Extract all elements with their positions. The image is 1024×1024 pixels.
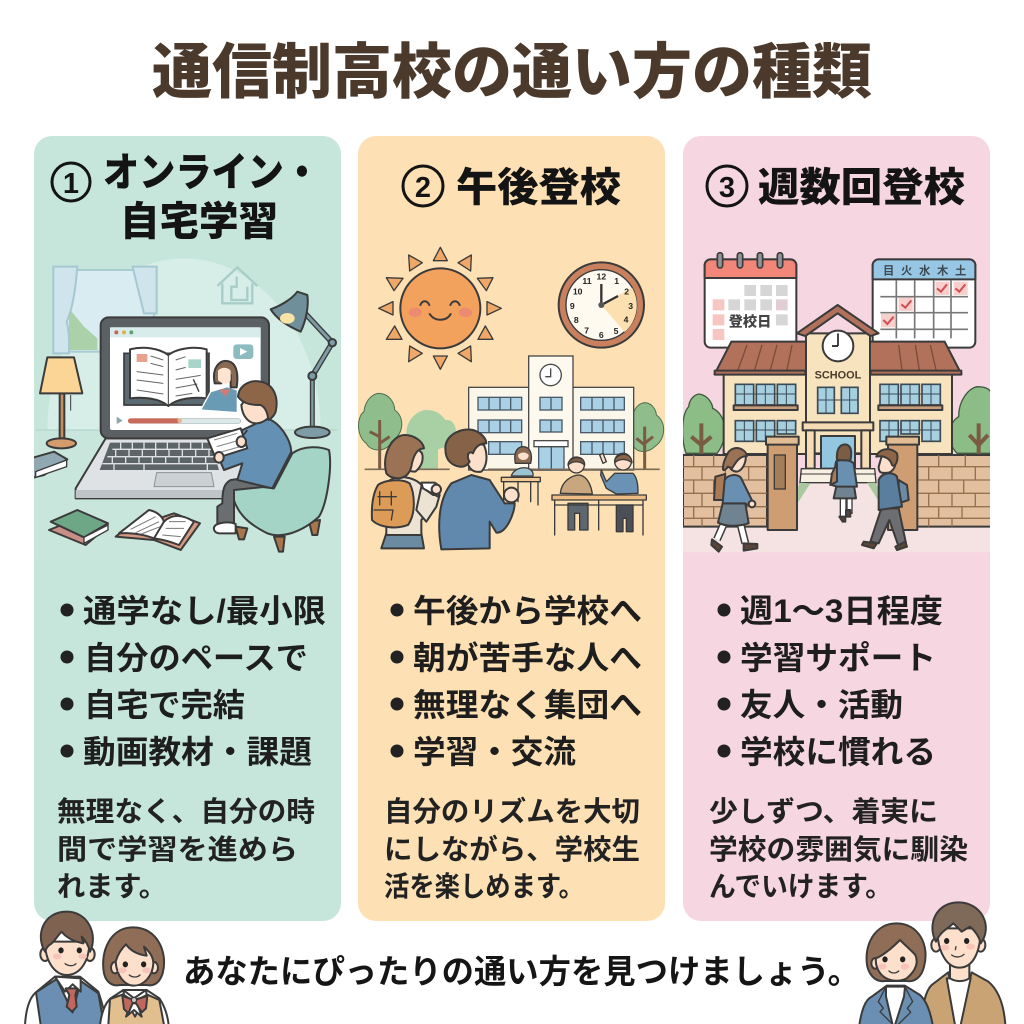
description: weekly: んでいけます。	[709, 871, 892, 902]
icon: floor lamp	[271, 292, 336, 438]
bullet list: online	[60, 593, 326, 770]
icon: wall clock at two o'clock: 3	[628, 301, 633, 311]
icon: school building	[365, 356, 660, 470]
icon: attendance calendar: 登校日	[729, 314, 771, 330]
icon: wall clock at two o'clock: 2	[624, 286, 629, 296]
bullet list: afternoon: 午後から学校へ	[413, 593, 642, 629]
icon: sun	[379, 247, 501, 369]
icon: wall clock at two o'clock: 9	[570, 301, 575, 311]
icon: table lamp	[40, 357, 82, 448]
icon: wall clock at two o'clock: 6	[599, 330, 604, 340]
heading: online home study: オンライン・	[103, 151, 320, 195]
icon: wall clock at two o'clock: 11	[582, 276, 592, 286]
bullet list: online: 自分のペースで	[84, 640, 308, 676]
seated students at double desk	[552, 453, 646, 535]
girl walking into school	[830, 444, 857, 522]
heading: online home study	[52, 151, 320, 244]
icon: wall clock at two o'clock: 4	[624, 315, 629, 325]
description: afternoon	[384, 795, 640, 902]
icon: closed book stack	[31, 452, 108, 545]
description: online: 間で学習を進めら	[57, 834, 298, 865]
description: weekly: 学校の雰囲気に馴染	[709, 834, 968, 865]
on-screen book	[124, 353, 209, 405]
icon: wall clock at two o'clock	[559, 262, 644, 348]
girl student	[100, 927, 169, 1024]
icon: window with curtains	[53, 267, 157, 353]
girl walking left	[711, 448, 757, 552]
front boy in blue jacket	[439, 429, 519, 549]
description: weekly: 少しずつ、着実に	[709, 796, 938, 827]
heading: afternoon attendance: 2	[415, 172, 431, 204]
on-screen teacher	[201, 387, 237, 413]
heading: several days a week: 週数回登校	[758, 166, 965, 210]
bullet list: weekly	[718, 593, 943, 770]
icon: laptop	[74, 316, 270, 500]
boy walking right	[862, 449, 909, 550]
boy student	[25, 912, 105, 1024]
heading: online home study: 自宅学習	[120, 200, 278, 244]
panel: online home study	[31, 136, 341, 921]
title: 通信制高校の通い方の種類	[152, 39, 872, 106]
illustration: sun, clock and school	[359, 247, 664, 549]
icon: weekly check calendar: 目火水木土	[883, 264, 966, 278]
bullet list: afternoon: 無理なく集団へ	[413, 687, 642, 723]
bullet list: weekly: 学習サポート	[740, 640, 936, 676]
heading: online home study: 1	[63, 168, 79, 200]
icon: wall clock at two o'clock: 8	[574, 315, 579, 325]
bullet list: afternoon: 学習・交流	[413, 734, 576, 770]
bullet list: weekly: 週1〜3日程度	[740, 593, 943, 629]
bullet list: online: 自宅で完結	[84, 687, 245, 723]
icon: wall clock at two o'clock: 12	[597, 271, 606, 281]
description: afternoon: 活を楽しめます。	[384, 871, 584, 902]
panel: several days a week	[683, 136, 992, 921]
icon: wall clock at two o'clock: 5	[614, 326, 619, 336]
panel: afternoon attendance	[358, 136, 665, 921]
icon: house	[217, 267, 257, 303]
heading: several days a week: 3	[719, 172, 735, 204]
room glow	[47, 258, 321, 430]
icon: wall clock at two o'clock: 7	[584, 325, 589, 335]
front girl with backpack	[372, 435, 441, 548]
bullet list: online: 動画教材・課題	[83, 734, 312, 770]
description: afternoon: 自分のリズムを大切	[384, 795, 640, 827]
description: online: れます。	[57, 871, 167, 902]
icon: armchair	[231, 447, 330, 552]
icon: trees	[359, 393, 664, 470]
icon: school building	[715, 305, 961, 507]
description: weekly	[709, 796, 968, 902]
bullet list: afternoon	[390, 593, 642, 770]
description: online	[57, 796, 315, 902]
icon: attendance calendar	[705, 253, 796, 348]
mother	[859, 923, 933, 1024]
bullet list: weekly: 友人・活動	[740, 687, 903, 723]
icon: school building: SCHOOL	[815, 370, 861, 382]
bullet list: online: 通学なし/最小限	[83, 593, 326, 629]
father	[922, 902, 1005, 1024]
student figure	[207, 381, 291, 533]
students, footer left	[25, 912, 169, 1024]
icon: wall clock at two o'clock: 1	[614, 276, 619, 286]
icon: open book	[116, 510, 200, 550]
parents, footer right	[859, 902, 1005, 1024]
footer message: あなたにぴったりの通い方を見つけましょう。	[183, 953, 860, 990]
bullet list: weekly: 学校に慣れる	[740, 734, 936, 770]
icon: wall clock at two o'clock: 10	[573, 287, 583, 297]
pale ground	[683, 527, 990, 552]
bullet list: afternoon: 朝が苦手な人へ	[413, 640, 642, 676]
icon: trees	[683, 387, 992, 455]
icon: brick wall and gate posts	[683, 437, 991, 530]
heading: afternoon attendance: 午後登校	[456, 166, 621, 210]
illustration: calendars and school gate	[683, 253, 992, 552]
description: afternoon: にしながら、学校生	[384, 833, 640, 865]
far student at desk	[501, 447, 540, 505]
icon: weekly check calendar	[873, 259, 975, 348]
illustration: student at laptop	[31, 258, 341, 560]
description: online: 無理なく、自分の時	[57, 796, 315, 827]
